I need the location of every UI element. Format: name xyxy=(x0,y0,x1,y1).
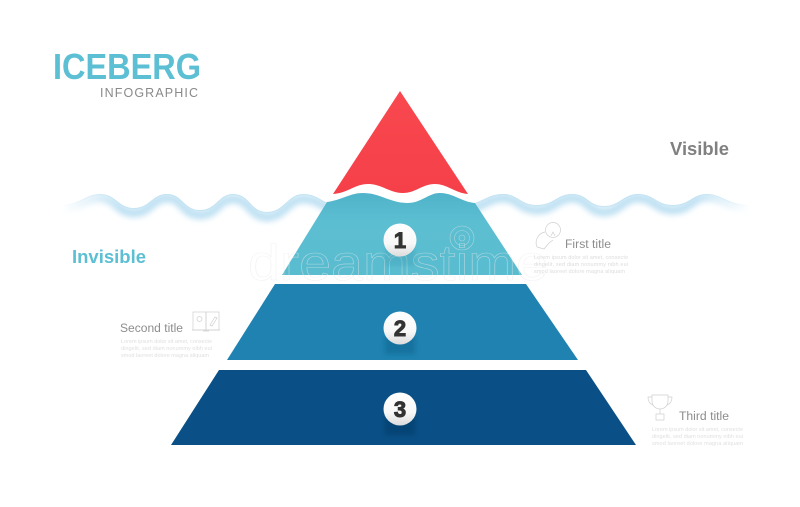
callout: second title: dingelit, sed diam nonummy nibh eui xyxy=(121,346,212,352)
label: Visible: Visible xyxy=(670,138,729,159)
icon: head with light bulb xyxy=(536,222,560,249)
number badge 1 xyxy=(384,224,416,266)
label: Invisible: Invisible xyxy=(72,246,146,267)
iceberg tip: red triangle xyxy=(333,91,468,194)
pyramid tier 2 xyxy=(227,284,578,360)
pyramid tier 3 xyxy=(171,370,636,445)
callout: first title: First title xyxy=(565,239,611,251)
callout: first title xyxy=(534,222,628,275)
callout: third title: dingelit, sed diam nonummy nibh eui xyxy=(652,434,743,440)
callout: first title: smod laoreet dolore magna aliquam xyxy=(534,269,625,275)
callout: first title: dingelit, sed diam nonummy nibh eui xyxy=(534,262,628,268)
callout: first title: Lorem ipsum dolor sit amet, consecte xyxy=(534,255,628,261)
title: ICEBERG xyxy=(53,46,201,87)
watermark: dreamstime xyxy=(248,235,548,291)
callout: third title xyxy=(648,395,743,447)
icon: trophy xyxy=(648,395,672,420)
number badge 2 xyxy=(384,312,416,354)
callout: second title: Second title xyxy=(120,323,183,335)
callout: third title: Lorem ipsum dolor sit amet, consecte xyxy=(652,427,743,433)
water wave left xyxy=(60,194,330,217)
number badge 3: 3 xyxy=(394,397,406,422)
callout: second title: smod laoreet dolore magna aliquam xyxy=(121,353,209,359)
callout: third title: smod laoreet dolore magna aliquam xyxy=(652,441,743,447)
callout: third title: Third title xyxy=(679,411,729,423)
water wave right xyxy=(472,194,750,212)
title: INFOGRAPHIC xyxy=(100,86,198,100)
icon: open book with bulb and pencil xyxy=(192,312,220,331)
number badge 1: 1 xyxy=(394,228,406,253)
callout: second title: Lorem ipsum dolor sit amet, consecte xyxy=(121,339,212,345)
number badge 3 xyxy=(384,392,416,435)
callout: second title xyxy=(120,312,220,359)
pyramid tier 1 xyxy=(282,193,522,275)
number badge 2: 2 xyxy=(394,316,406,341)
